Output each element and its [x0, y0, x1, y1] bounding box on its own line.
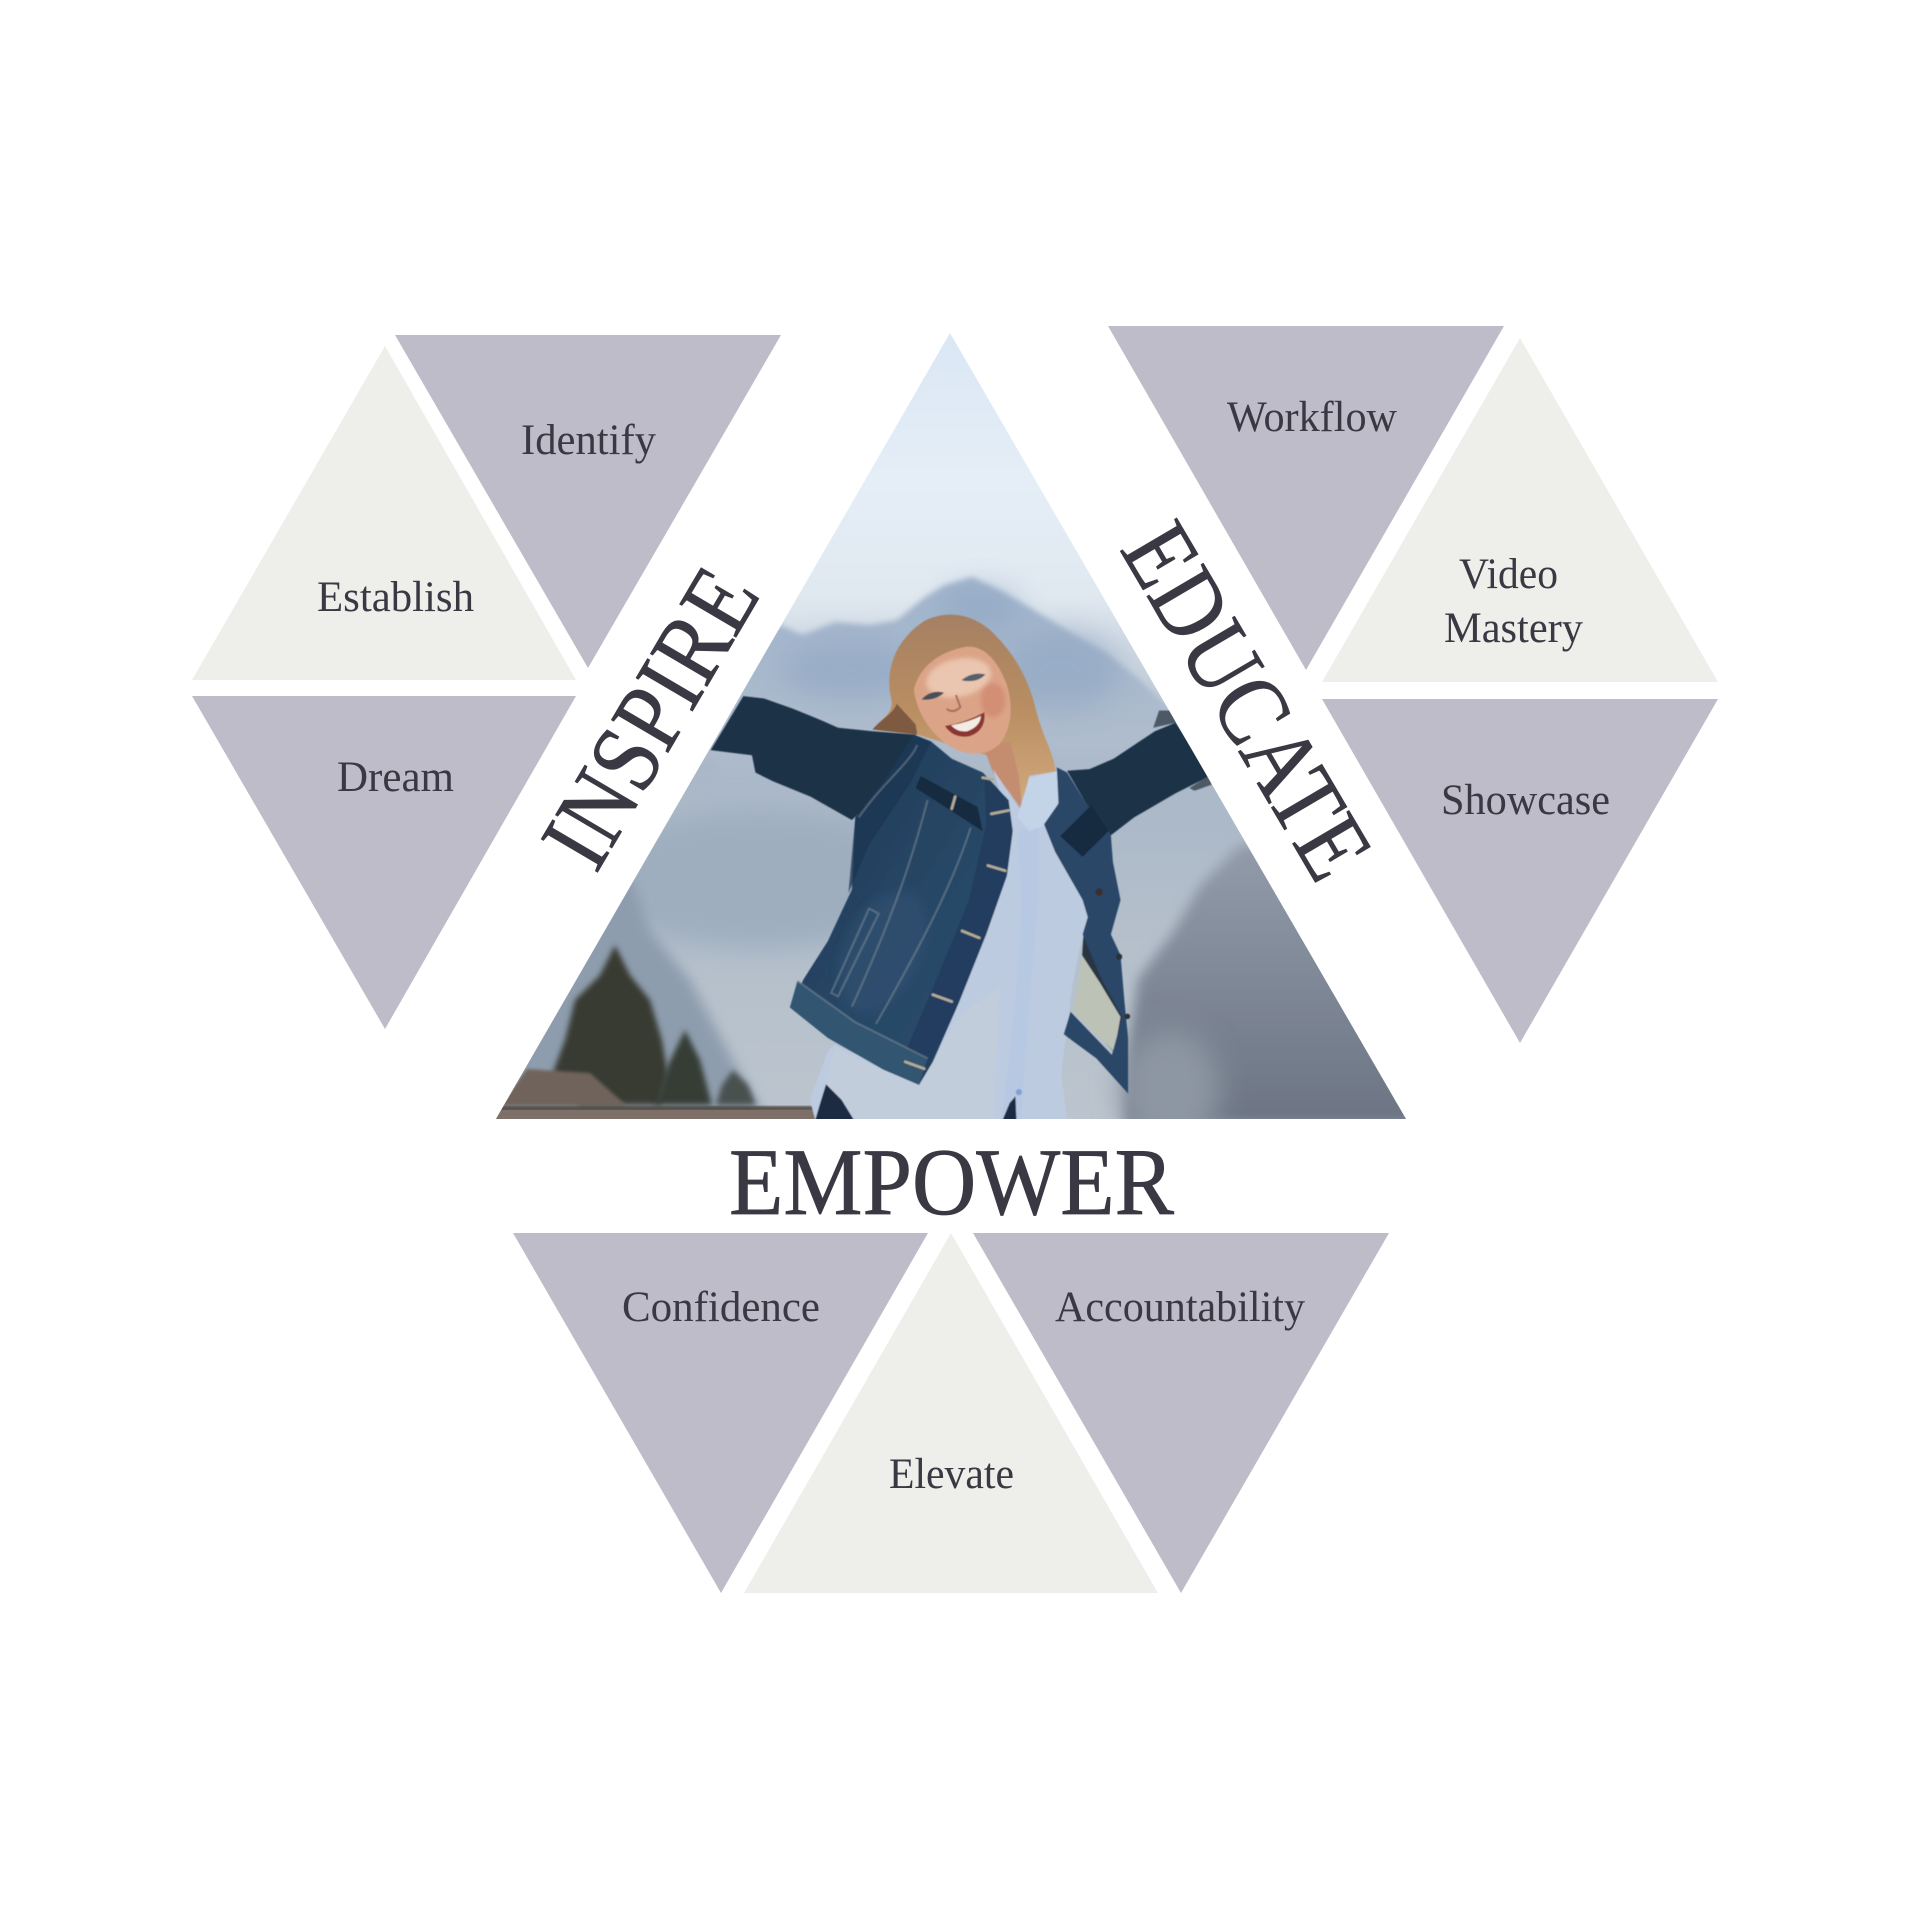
- label: Establish: Establish: [317, 574, 474, 621]
- label: Accountability: Accountability: [1055, 1284, 1305, 1331]
- shirt: [810, 769, 1088, 1122]
- panel: Elevate: [744, 1233, 1158, 1593]
- woman: [711, 615, 1212, 1122]
- mouth: [945, 712, 985, 737]
- cheeks: [981, 683, 1005, 717]
- shirt and jacket button dots: [1016, 888, 1130, 1095]
- sky background: [480, 320, 1420, 1130]
- face: [914, 647, 1011, 754]
- face highlight: [923, 652, 995, 703]
- neck: [983, 742, 1022, 810]
- seam lines: [797, 745, 971, 1058]
- jacket right panel: [1044, 767, 1128, 1094]
- label: Workflow: Workflow: [1227, 394, 1397, 441]
- panel: Identify: [395, 335, 781, 668]
- left mountain: [496, 882, 764, 1119]
- roof: [500, 1069, 627, 1106]
- label: Confidence: Confidence: [622, 1284, 820, 1331]
- panel: Accountability: [973, 1233, 1389, 1593]
- heading: INSPIRE: INSPIRE: [519, 549, 780, 886]
- heading: EDUCATE: EDUCATE: [1100, 504, 1395, 898]
- teeth: [951, 716, 981, 731]
- label: Identify: Identify: [521, 417, 656, 464]
- left sleeve: [711, 696, 916, 820]
- panel: Dream: [192, 696, 576, 1029]
- panel: Workflow: [1108, 326, 1504, 670]
- shirt placket: [1002, 828, 1039, 1122]
- right eye: [961, 674, 985, 681]
- tree 1: [553, 945, 668, 1105]
- panel: Confidence: [513, 1233, 928, 1593]
- right chest pocket: [1060, 805, 1108, 857]
- trousers: [815, 1084, 1016, 1122]
- right haze: [1108, 1028, 1227, 1119]
- nose: [947, 695, 960, 711]
- panel: Video Mastery: [1322, 338, 1718, 682]
- infographic: [192, 326, 1718, 1593]
- lower building: [496, 1110, 816, 1119]
- chest pocket: [916, 776, 983, 831]
- hem band: [790, 981, 928, 1085]
- panel: Showcase: [1322, 699, 1718, 1043]
- tree 2: [655, 1030, 712, 1105]
- heading: EMPOWER: EMPOWER: [729, 1129, 1175, 1235]
- photo: woman with raised arms in front of mountains: [480, 320, 1420, 1150]
- jacket lining: [1076, 921, 1125, 1053]
- cuff: [1153, 711, 1212, 791]
- jacket front placket: [908, 780, 1013, 1082]
- right dark mountain: [1125, 845, 1420, 1125]
- left eye: [921, 692, 944, 700]
- mountain shadow blotches: [780, 588, 1120, 710]
- collar: [1020, 778, 1060, 830]
- hair dark tuft: [873, 704, 917, 735]
- ground band: [490, 1106, 820, 1111]
- right sleeve: [1067, 723, 1210, 835]
- jacket main left panel: [790, 735, 1013, 1085]
- jacket shading: [848, 735, 931, 893]
- distant blue mountain: [727, 575, 1226, 808]
- label: Video: Video: [1459, 551, 1558, 598]
- hair back: [873, 615, 1056, 805]
- label: Mastery: Mastery: [1444, 605, 1583, 652]
- buttons: [905, 778, 1009, 1069]
- label: Showcase: Showcase: [1441, 777, 1610, 824]
- tree 3: [716, 1070, 756, 1105]
- label: Dream: Dream: [337, 754, 454, 801]
- shirt lower shade: [817, 986, 1000, 1122]
- label: Elevate: Elevate: [889, 1451, 1014, 1498]
- panel: Establish: [192, 346, 576, 680]
- jacket highlight: [844, 895, 916, 1002]
- mid haze: [616, 814, 854, 954]
